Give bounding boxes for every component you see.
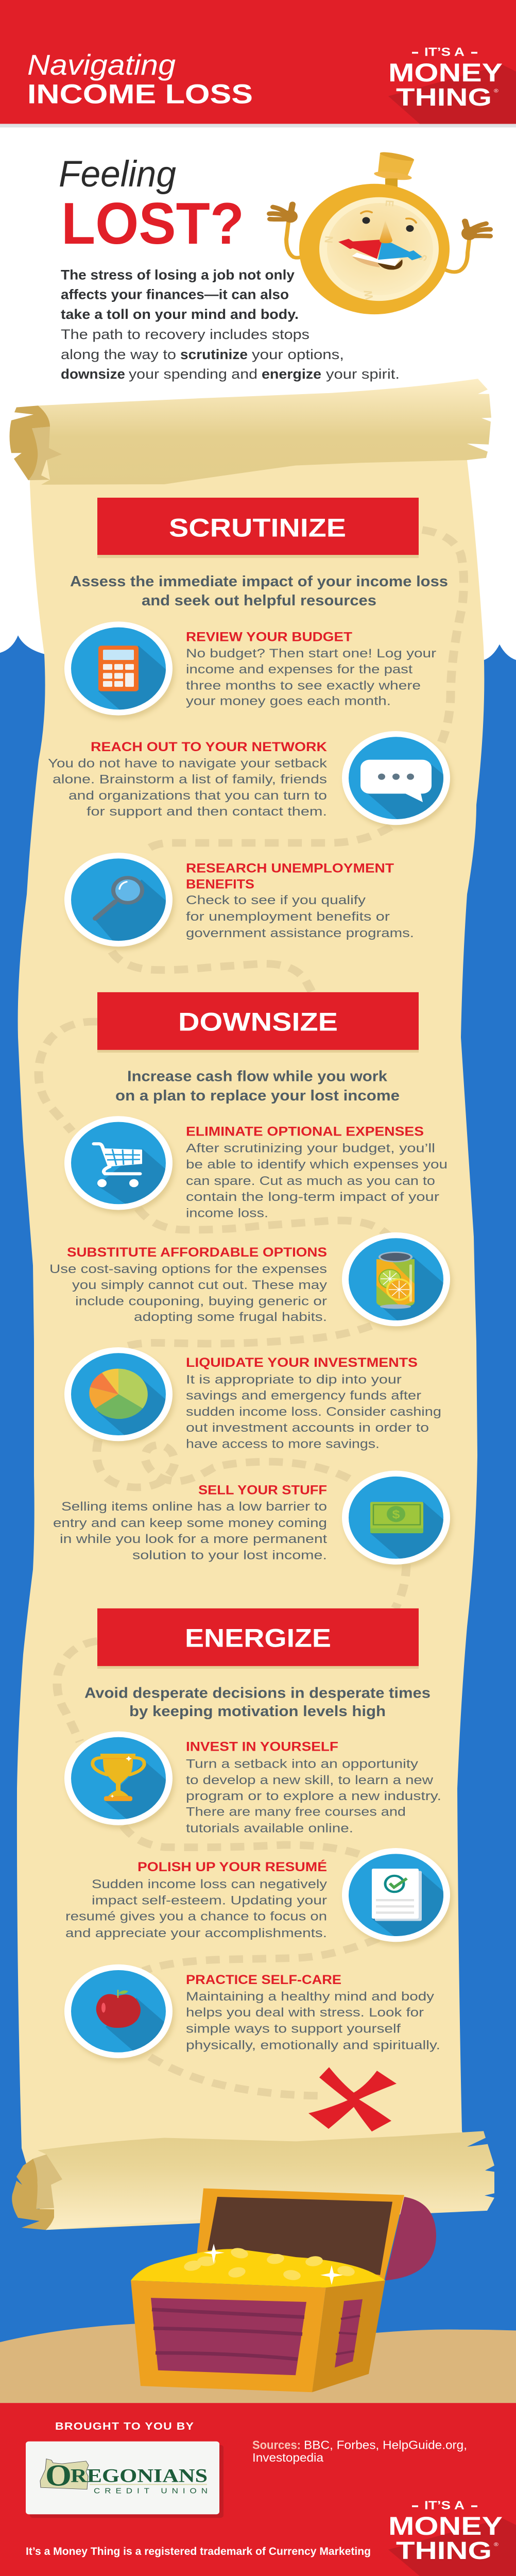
logo: It's a Money Thing (top) <box>388 45 503 111</box>
compass letters: S <box>416 253 430 262</box>
compass letters: E <box>383 199 396 207</box>
logo: It's a Money Thing (bottom): THING <box>396 2537 492 2565</box>
icon: stack of cash: $ <box>392 1508 400 1521</box>
item: Substitute affordable options: Use cost-saving options for the expenses <box>49 1262 327 1276</box>
sponsor logo card <box>26 2442 223 2518</box>
scroll top band <box>9 379 491 485</box>
intro paragraph: along the way to <box>61 347 176 362</box>
roll fold <box>33 2155 62 2209</box>
coins <box>183 2246 356 2281</box>
item: Reach out to your network: and organizations that you can turn to <box>68 788 327 802</box>
item: Reach out to your network: REACH OUT TO YOUR NETWORK <box>91 739 327 754</box>
mouth <box>352 252 403 270</box>
intro paragraph: your options, <box>252 347 344 362</box>
item: Liquidate your investments: LIQUIDATE YOUR INVESTMENTS <box>186 1355 418 1370</box>
compass letters: W <box>362 289 376 300</box>
face <box>319 197 439 301</box>
item: Research unemployment benefits: Check to see if you qualify <box>186 893 366 907</box>
section banner: Downsize <box>97 992 419 1053</box>
intro paragraph: your spirit. <box>326 367 400 382</box>
item: Eliminate optional expenses: contain the long-term impact of your <box>186 1190 439 1204</box>
roll end <box>9 405 50 480</box>
section banner: Downsize: DOWNSIZE <box>178 1007 338 1037</box>
chest side <box>312 2280 385 2392</box>
heading: Feeling: Feeling <box>59 154 176 195</box>
item: Polish up your resume <box>65 1859 328 1940</box>
item: Sell your stuff: entry and can keep some money coming <box>53 1516 327 1530</box>
subhead: Energize: Avoid desperate decisions in desperate times <box>84 1684 431 1701</box>
item: Practice self-care: physically, emotionally and spiritually. <box>186 2038 440 2052</box>
item: Polish up your resume: POLISH UP YOUR RESUMÉ <box>137 1859 327 1874</box>
case <box>299 184 450 314</box>
item: Polish up your resume: and appreciate your accomplishments. <box>65 1926 327 1940</box>
intro paragraph: your spending and <box>129 367 257 382</box>
brought to you by: BROUGHT TO YOU BY <box>55 2421 194 2432</box>
gold pile <box>131 2249 385 2287</box>
title: Income Loss: INCOME LOSS <box>27 79 253 110</box>
sources: Investopedia <box>252 2451 324 2464</box>
item: Research unemployment benefits: for unemployment benefits or <box>186 909 390 924</box>
item: Practice self-care: Maintaining a healthy mind and body <box>186 1989 435 2004</box>
item: Polish up your resume: resumé gives you a chance to focus on <box>65 1909 327 1923</box>
icon: pie chart <box>64 1347 175 1445</box>
icon: apple <box>64 1964 175 2062</box>
logo: It's a Money Thing (top): MONEY <box>388 58 503 87</box>
item: Invest in yourself: program or to explore a new industry. <box>186 1789 441 1803</box>
trademark line: It’s a Money Thing is a registered trademark of Currency Marketing <box>26 2546 371 2557</box>
item: Substitute affordable options: SUBSTITUTE AFFORDABLE OPTIONS <box>67 1245 327 1259</box>
item: Invest in yourself: tutorials available online. <box>186 1821 353 1835</box>
section banner: Scrutinize <box>97 498 419 558</box>
item: Substitute affordable options: include couponing, buying generic or <box>75 1294 327 1308</box>
sponsor logo card: REGONIANS <box>71 2465 208 2486</box>
item: Eliminate optional expenses <box>186 1124 448 1220</box>
section banner: Scrutinize: SCRUTINIZE <box>169 513 346 543</box>
item: Eliminate optional expenses: After scrutinizing your budget, you’ll <box>186 1141 435 1155</box>
item: Liquidate your investments: It is appropriate to dip into your <box>186 1372 402 1386</box>
item: Reach out to your network: You do not have to navigate your setback <box>48 756 328 770</box>
item: Liquidate your investments: sudden income loss. Consider cashing <box>186 1404 441 1418</box>
nose <box>380 221 392 243</box>
icon: soda can <box>342 1232 452 1330</box>
sponsor logo card: CREDIT UNION <box>94 2487 208 2495</box>
item: Practice self-care <box>186 1972 440 2052</box>
subhead: Energize: by keeping motivation levels high <box>129 1703 386 1720</box>
item: Reach out to your network: for support and then contact them. <box>87 804 327 819</box>
logo: It's a Money Thing (top): IT’S A <box>424 45 465 59</box>
intro paragraph: scrutinize <box>180 347 248 362</box>
item: Invest in yourself: There are many free courses and <box>186 1804 406 1819</box>
item: Sell your stuff: solution to your lost income. <box>132 1548 327 1562</box>
item: Sell your stuff: in while you look for a more permanent <box>60 1532 328 1546</box>
item: Research unemployment benefits: RESEARCH UNEMPLOYMENT <box>186 860 394 875</box>
subhead: Scrutinize: Assess the immediate impact of your income loss <box>70 573 448 589</box>
item: Liquidate your investments: savings and emergency funds after <box>186 1388 421 1402</box>
intro paragraph: downsize <box>61 367 125 382</box>
left arm <box>286 222 309 258</box>
subhead: Downsize: Increase cash flow while you work <box>127 1068 388 1084</box>
item: Substitute affordable options <box>49 1245 328 1324</box>
item: Reach out to your network: alone. Brainstorm a list of family, friends <box>53 772 327 786</box>
intro paragraph: The path to recovery includes stops <box>61 327 309 342</box>
subhead: Downsize: on a plan to replace your lost income <box>115 1087 400 1104</box>
sponsor logo card: O <box>45 2459 72 2493</box>
section banner: Energize: ENERGIZE <box>185 1623 331 1653</box>
item: Liquidate your investments: have access to more savings. <box>186 1436 380 1451</box>
footer panel <box>0 2403 516 2576</box>
item: Substitute affordable options: adopting some frugal habits. <box>134 1310 327 1324</box>
item: Review your budget: No budget? Then start one! Log your <box>186 646 436 660</box>
item: Invest in yourself: Turn a setback into an opportunity <box>186 1756 419 1771</box>
logo: It's a Money Thing (top): THING <box>396 83 492 111</box>
logo: It's a Money Thing (bottom) <box>388 2499 503 2565</box>
intro paragraph: affects your finances—it can also <box>61 287 289 302</box>
item: Review your budget <box>186 629 436 708</box>
logo: It's a Money Thing (top): ® <box>494 88 499 94</box>
icon: chat bubble <box>342 731 452 828</box>
intro paragraph: The stress of losing a job not only <box>61 267 295 283</box>
illustration: treasure chest <box>131 2189 436 2392</box>
item: Review your budget: income and expenses for the past <box>186 662 413 676</box>
item: Sell your stuff <box>53 1482 328 1562</box>
right arm <box>444 240 469 272</box>
scroll body <box>17 447 487 2230</box>
item: Liquidate your investments <box>186 1355 441 1451</box>
chest front <box>131 2280 326 2392</box>
item: Practice self-care: simple ways to support yourself <box>186 2021 401 2036</box>
logo: It's a Money Thing (bottom): IT’S A <box>424 2499 465 2512</box>
item: Eliminate optional expenses: be able to identify which expenses you <box>186 1157 448 1171</box>
roll fold <box>28 427 62 480</box>
red needle <box>338 239 382 259</box>
lid back <box>385 2197 436 2280</box>
lid interior <box>208 2197 392 2275</box>
title: Navigating: Navigating <box>27 49 176 81</box>
item: Eliminate optional expenses: can spare. Cut as much as you can to <box>186 1174 435 1188</box>
item: Practice self-care: PRACTICE SELF-CARE <box>186 1972 341 1987</box>
icon: magnifying glass <box>64 853 175 950</box>
subhead: Scrutinize <box>70 573 448 609</box>
icon: resume document <box>342 1848 452 1945</box>
item: Review your budget: REVIEW YOUR BUDGET <box>186 629 352 644</box>
item: Polish up your resume: impact self-esteem. Updating your <box>92 1893 327 1907</box>
lid frame <box>197 2189 404 2280</box>
item: Invest in yourself <box>186 1739 441 1835</box>
item: Reach out to your network <box>48 739 328 819</box>
roll end <box>12 2159 54 2230</box>
background: sand <box>0 2324 516 2403</box>
icon: shopping cart <box>64 1116 175 1213</box>
compass letters <box>322 199 430 300</box>
intro paragraph: take a toll on your mind and body. <box>61 307 299 322</box>
logo: It's a Money Thing (bottom): ® <box>494 2542 499 2548</box>
sources: BBC, Forbes, HelpGuide.org, <box>304 2438 467 2452</box>
item: Sell your stuff: Selling items online has a low barrier to <box>61 1499 327 1513</box>
right hand <box>464 222 490 238</box>
item: Liquidate your investments: out investment accounts in order to <box>186 1420 429 1435</box>
eyes and brows <box>361 211 416 232</box>
sources <box>252 2438 467 2464</box>
subhead: Energize <box>84 1684 431 1720</box>
left hand <box>269 205 295 221</box>
item: Polish up your resume: Sudden income loss can negatively <box>92 1877 328 1891</box>
subhead: Downsize <box>115 1068 400 1104</box>
background: white sky <box>0 127 516 664</box>
character: compass mascot <box>269 150 490 314</box>
header bar <box>0 0 516 127</box>
icon: stack of cash <box>342 1471 452 1568</box>
scroll bottom band <box>12 2131 494 2230</box>
item: Invest in yourself: to develop a new skill, to learn a new <box>186 1773 433 1787</box>
crown <box>378 154 414 178</box>
item: Review your budget: your money goes each month. <box>186 693 391 708</box>
compass letters: N <box>322 235 335 244</box>
blue needle <box>378 243 422 260</box>
item: Invest in yourself: INVEST IN YOURSELF <box>186 1739 338 1754</box>
subhead: Scrutinize: and seek out helpful resources <box>142 592 376 609</box>
icon: calculator <box>64 621 175 719</box>
item: Review your budget: three months to see exactly where <box>186 678 421 692</box>
item: Sell your stuff: SELL YOUR STUFF <box>198 1482 327 1497</box>
item: Eliminate optional expenses: ELIMINATE OPTIONAL EXPENSES <box>186 1124 424 1139</box>
icon: trophy <box>64 1732 175 1829</box>
item: Research unemployment benefits: government assistance programs. <box>186 926 414 940</box>
sparkles <box>203 2244 225 2263</box>
heading: LOST?: LOST? <box>61 191 244 257</box>
dashed trail <box>39 530 464 2096</box>
intro paragraph <box>61 267 400 382</box>
icon: red X marks the spot <box>308 2067 397 2131</box>
item: Substitute affordable options: you simply cannot cut out. These may <box>72 1278 328 1292</box>
section banner: Energize <box>97 1608 419 1669</box>
item: Practice self-care: helps you deal with stress. Look for <box>186 2005 424 2020</box>
sources: Sources: <box>252 2438 301 2452</box>
background: blue sea <box>0 635 516 2370</box>
item: Eliminate optional expenses: income loss. <box>186 1206 268 1220</box>
logo: It's a Money Thing (bottom): MONEY <box>388 2512 503 2540</box>
intro paragraph: energize <box>262 367 321 382</box>
item: Research unemployment benefits <box>186 860 414 940</box>
item: Research unemployment benefits: BENEFITS <box>186 876 254 891</box>
